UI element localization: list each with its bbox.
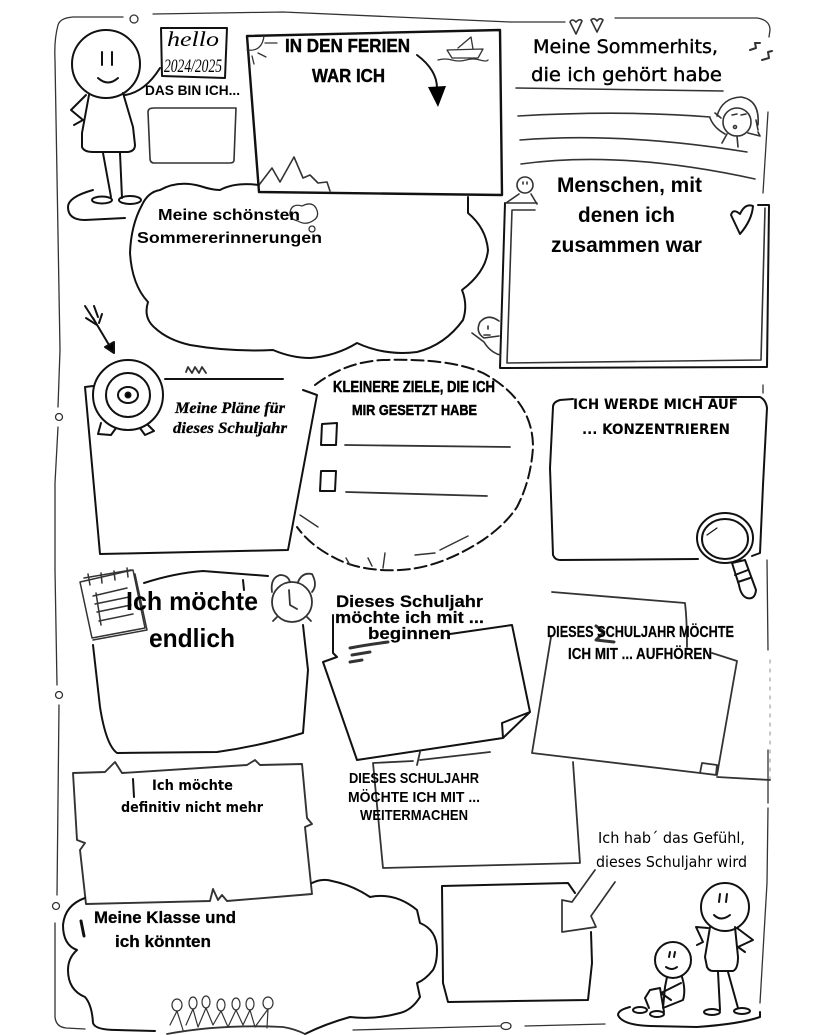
panel: Meine Klasse cloud [63,880,437,1034]
panel: In den Ferien war ich [247,30,502,195]
icon: small person on frame [506,177,537,204]
sign: hello 2024/2025: 2024/2025 [164,56,222,77]
panel: Ich werde mich auf konzentrieren [550,397,767,598]
heading: weitermachen: WEITERMACHEN [360,807,468,824]
heading: die ich gehört habe: die ich gehört habe [531,64,722,86]
panel: Menschen mit denen ich zusammen war [472,174,769,368]
sign: hello 2024/2025 [161,27,227,78]
heading: definitiv nicht mehr: definitiv nicht mehr [121,800,263,816]
heading: konzentrieren: ... KONZENTRIEREN [582,422,730,438]
stray mark [243,580,244,590]
smudge [596,626,614,642]
faded sketch residue [300,515,468,568]
illustration: stick figure pointing [68,30,160,220]
heading: Sommererinnerungen: Sommererinnerungen [137,230,322,247]
heading: ich mit aufhören: ICH MIT ... AUFHÖREN [568,644,712,663]
heading: ich könnten: ich könnten [115,932,211,951]
smudge [350,642,388,662]
heading: Dieses Schuljahr: DIESES SCHULJAHR [349,770,479,787]
heading: In den Ferien: IN DEN FERIEN [285,36,410,56]
icon: music notes [750,43,772,60]
heading: Das bin ich: DAS BIN ICH... [145,82,240,98]
heading: endlich: endlich [149,623,235,653]
icon: thought bubble [290,204,318,232]
heading: Dieses Schuljahr: Dieses Schuljahr [336,592,483,611]
heading: war ich: WAR ICH [312,66,385,86]
icon: hearts [570,19,603,34]
panel: Dieses Schuljahr beginnen [323,592,530,760]
icon: sun [247,36,277,64]
icon: magnifying glass [697,513,756,598]
icon: boat [438,37,488,61]
icon: mountains [259,157,330,191]
panel: Ich möchte endlich [80,568,315,753]
heading: Ich möchte: Ich möchte [152,778,233,794]
heading: beginnen: beginnen [368,624,451,643]
sign: hello 2024/2025: hello [167,27,219,51]
icon: person with headphones [710,97,760,147]
heading: Meine Sommerhits: Meine Sommerhits, [533,36,718,58]
heading: zusammen war: zusammen war [551,234,702,257]
panel: Meine schönsten Sommererinnerungen cloud [130,184,488,358]
heading: Meine schönsten: Meine schönsten [158,207,300,224]
arrow: pointing to box [562,870,615,932]
panel: Meine Pläne für dieses Schuljahr [85,360,317,554]
stray mark [133,779,134,797]
song lines [516,88,755,179]
heading: möchte ich mit: möchte ich mit ... [335,608,484,627]
panel: Dieses Schuljahr weitermachen [348,752,580,868]
heading: mir gesetzt habe: MIR GESETZT HABE [352,402,477,419]
panel: Kleinere Ziele dashed ellipse [297,360,533,570]
checkbox 1 [321,423,337,445]
heading: Meine Pläne für: Meine Pläne für [174,400,286,417]
icon: squiggle [186,367,206,373]
heading: Ich werde mich auf: ICH WERDE MICH AUF [573,397,738,413]
icon: row of people [170,996,273,1030]
panel: Meine Sommerhits [516,19,772,179]
panel: Das bin ich box [148,108,236,163]
heading: Kleinere Ziele: KLEINERE ZIELE, DIE ICH [333,379,495,396]
icon: alarm clock [272,574,315,622]
panel: Ich möchte definitiv nicht mehr [73,760,312,904]
text: Ich hab das Gefühl: Ich hab´ das Gefühl, [598,829,745,847]
panel: Dieses Schuljahr aufhören [532,592,770,780]
heading: dieses Schuljahr: dieses Schuljahr [173,420,288,437]
ground under people [167,1026,305,1034]
arrow: curved down [417,55,446,107]
icon: notepad [80,568,147,640]
icon: heart [731,205,753,234]
icon: arrow with feathers [85,306,114,353]
illustration: two stick figures [618,883,760,1027]
heading: Meine Klasse und: Meine Klasse und [94,908,236,927]
stray mark [81,921,84,936]
heading: Dieses Schuljahr möchte: DIESES SCHULJAHR MÖCHTE [547,622,734,641]
heading: denen ich: denen ich [578,204,675,227]
heading: Ich möchte: Ich möchte [126,586,258,616]
panel: Ich hab das Gefühl box [442,883,592,1002]
heading: möchte ich mit: MÖCHTE ICH MIT ... [348,789,480,806]
icon: peeking person [472,317,500,355]
heading: Menschen: Menschen, mit [557,174,702,197]
goal lines [345,445,510,496]
text: dieses Schuljahr wird: dieses Schuljahr wird [596,853,747,871]
checkbox 2 [320,471,336,491]
icon: target [93,360,163,435]
